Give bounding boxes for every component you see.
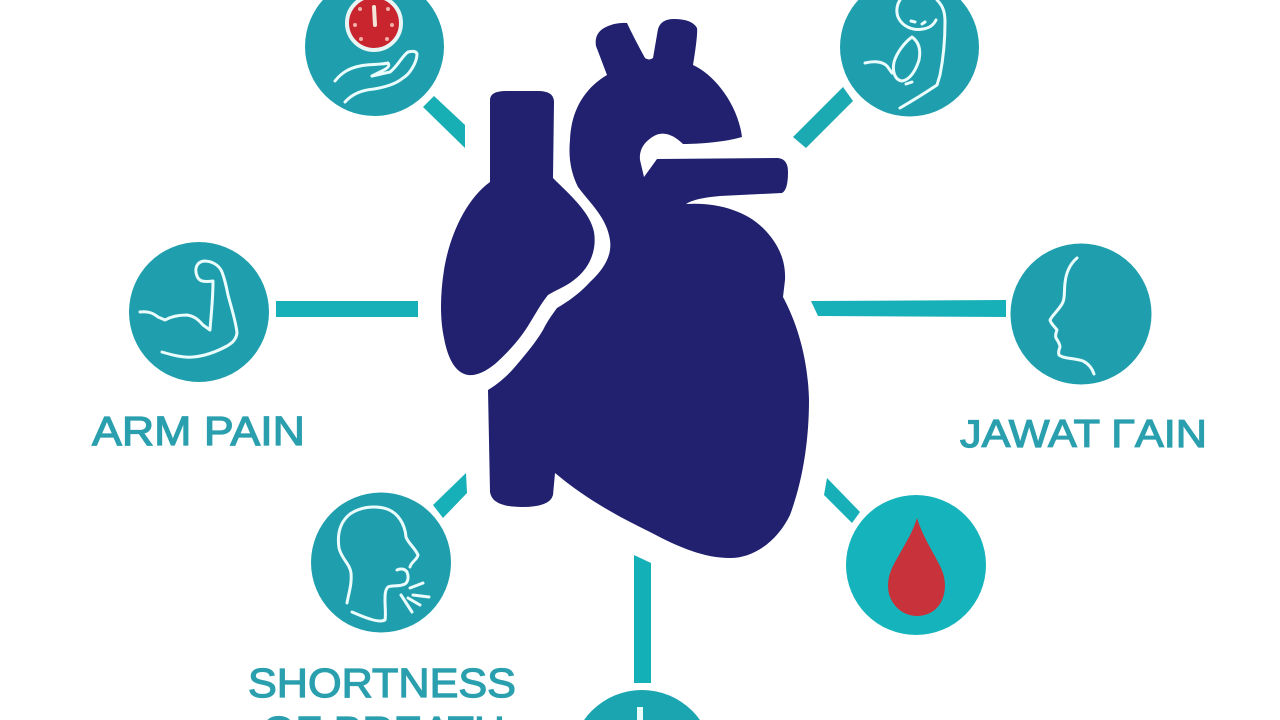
connector: bottom left — [433, 473, 467, 518]
connector: left — [276, 301, 418, 317]
connector: bottom right — [824, 478, 860, 523]
icon: head with breath — [311, 492, 451, 632]
heart illustration — [441, 19, 809, 558]
connector: bottom — [634, 555, 651, 683]
connector: right — [811, 300, 1006, 317]
label: arm pain: ARM PAIN — [92, 408, 305, 454]
icon: bottom circle, cropped — [571, 690, 713, 720]
icon: blood drop — [846, 495, 986, 635]
icon: torso — [840, 0, 979, 116]
heart: aorta, pulmonary artery and ventricles — [488, 19, 809, 558]
label: jawat pain: JAWAT ΓAIN — [960, 413, 1207, 456]
connector: top right — [793, 87, 853, 148]
heart: vena cava and right atrium — [441, 91, 595, 375]
label: shortness of breath: SHORTNESS — [248, 660, 516, 706]
icon: clock and hand — [305, 0, 444, 116]
icon: face profile — [1010, 244, 1152, 384]
icon: flexed arm — [129, 242, 269, 382]
connector: top left — [423, 96, 465, 148]
